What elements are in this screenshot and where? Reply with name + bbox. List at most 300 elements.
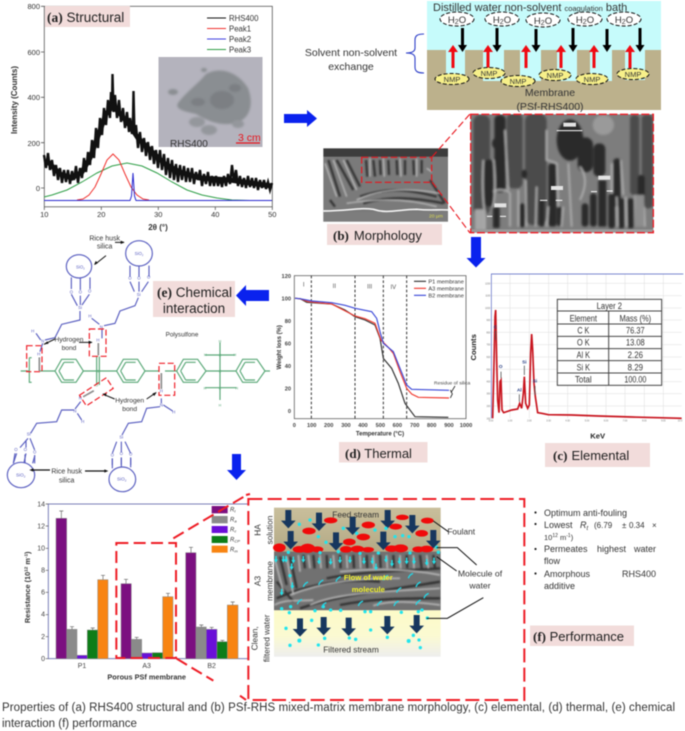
NMP labels: NMP xyxy=(584,75,600,84)
heading: (c) Elemental: (c) Elemental xyxy=(553,448,629,463)
y axis labels: 40 xyxy=(285,364,291,370)
molecule atoms: silane labels: H xyxy=(31,328,34,333)
label: bottom rice husk silica: silica xyxy=(59,477,75,484)
lower silica particles xyxy=(7,453,136,492)
legend: t xyxy=(234,509,236,514)
y tick labels: 1000 xyxy=(485,308,491,310)
red dashed frame xyxy=(248,499,524,700)
photo caption: RHS400 xyxy=(170,139,208,150)
x axis labels: 50 xyxy=(268,210,276,219)
heading: (d) Thermal: (d) Thermal xyxy=(345,446,412,461)
side label: clean filtered water: Clean, xyxy=(249,626,259,650)
axes xyxy=(491,274,683,418)
text block: performance bullets: flow xyxy=(544,556,561,566)
side label: A3 membrane xyxy=(253,561,275,601)
y axis labels: 14 xyxy=(37,501,45,508)
molecule atoms: polysulfone labels: C xyxy=(219,370,222,374)
peak labels: O xyxy=(499,364,503,369)
membrane block xyxy=(427,50,661,110)
x tick labels: 3.00 xyxy=(546,420,552,422)
molecule atoms: silane labels: N xyxy=(160,403,163,408)
y axis labels: 0 xyxy=(36,184,40,193)
NMP molecules xyxy=(435,68,649,86)
curve: A3 membrane xyxy=(295,298,449,398)
curve: Peak2 xyxy=(44,173,272,200)
molecular structure xyxy=(13,235,270,465)
stage labels: III xyxy=(367,285,372,291)
y axis labels: 800 xyxy=(27,2,40,11)
text block: performance bullets: m xyxy=(558,533,566,542)
label: top rice husk silica: Rice husk xyxy=(89,235,121,242)
molecule atoms: polysulfone labels: H xyxy=(235,386,238,390)
composition table: 8.29 xyxy=(628,362,643,372)
arrow: a to b xyxy=(284,110,317,127)
molecule atoms: silane labels: SiO xyxy=(76,264,83,269)
arrow heads xyxy=(43,241,157,396)
molecule atoms: silane labels: H xyxy=(81,419,84,424)
molecule atoms: silane labels: O xyxy=(79,290,83,295)
text block: performance bullets: highest xyxy=(597,544,627,554)
x tick labels: 4.00 xyxy=(565,420,571,422)
spectrum trace xyxy=(493,310,682,418)
bars: P1 xyxy=(56,518,108,659)
curve: P1 membrane xyxy=(295,298,448,417)
label: polysulfone: Polysulfone xyxy=(166,332,199,339)
molecule atoms: silane labels: O xyxy=(111,452,115,457)
H2O labels: 2 xyxy=(583,19,587,26)
composition table: 76.37 xyxy=(626,326,645,336)
label: solvent non-solvent exchange xyxy=(305,34,424,73)
legend: Peak3 xyxy=(229,46,251,54)
water molecules xyxy=(280,518,440,649)
x axis labels: 800 xyxy=(427,423,436,429)
molecule atoms: silane labels: Si xyxy=(78,305,82,310)
y tick labels: 200 xyxy=(486,406,491,408)
heading: (c) Elemental xyxy=(545,443,650,467)
text block: performance bullets: 0.34 xyxy=(629,521,645,530)
x axis labels: 500 xyxy=(376,423,385,429)
arrows to silica xyxy=(32,468,106,473)
H2O labels: O xyxy=(545,16,552,27)
x axis labels: 0 xyxy=(293,423,296,429)
H2O labels: O xyxy=(587,15,594,26)
molecule atoms: silane labels: O xyxy=(88,288,92,293)
label: top rice husk silica: silica xyxy=(97,244,113,251)
y axis title: -1 xyxy=(24,554,29,558)
composition table: 13.08 xyxy=(626,338,645,348)
y tick labels: 300 xyxy=(486,394,491,396)
y tick labels: 1200 xyxy=(485,283,491,285)
arrow: d to e xyxy=(236,285,269,306)
molecule atoms: silane labels: O xyxy=(14,447,18,452)
legend: Peak1 xyxy=(229,24,251,34)
filtered arrows xyxy=(293,615,424,637)
y axis labels: 0 xyxy=(288,409,291,415)
H2O molecules xyxy=(440,12,641,27)
peak labels: Si xyxy=(533,379,537,384)
label: solvent non-solvent exchange: Solvent non-solvent xyxy=(305,47,397,59)
y axis labels: 600 xyxy=(27,48,40,57)
panel: resistance bar chart xyxy=(23,495,248,682)
label: bottom rice husk silica xyxy=(51,468,83,484)
red solvent arrows xyxy=(448,45,635,68)
text block: performance bullets: water xyxy=(633,544,656,554)
label: filtered stream: Filtered stream xyxy=(323,644,379,654)
H2O labels: 2 xyxy=(455,19,459,26)
heading: (e) Chemical interaction xyxy=(153,281,235,317)
label: lower hydrogen bond: bond xyxy=(122,406,137,413)
arrow: b to c xyxy=(466,237,486,268)
side label: clean filtered water xyxy=(249,614,271,662)
x axis labels: 900 xyxy=(444,423,454,429)
label: feed stream: Feed stream xyxy=(332,509,379,519)
x tick labels: 2.00 xyxy=(527,420,532,422)
composition table: O K xyxy=(577,338,590,348)
stage labels: I xyxy=(303,283,305,289)
molecule atoms: silane labels: H xyxy=(172,409,175,414)
H2O labels: H xyxy=(576,15,583,26)
molecule atoms: silane labels: 2 xyxy=(83,266,85,270)
y axis labels xyxy=(27,2,40,193)
caption: Properties of (a) RHS400 structural and (b) PSf-RHS mixed-matrix membrane morphology, (c) elemental, (d) thermal, (e) chemical xyxy=(2,702,675,714)
H2O labels: H xyxy=(615,15,622,26)
text block: performance bullets: 10 xyxy=(544,533,552,542)
composition table: 100.00 xyxy=(624,374,646,384)
molecule atoms: silane labels: O xyxy=(129,452,133,457)
NMP labels: NMP xyxy=(625,70,641,79)
y axis labels: 20 xyxy=(285,387,291,393)
stage dashed lines xyxy=(311,276,407,419)
legend: Peak2 xyxy=(229,35,251,44)
composition table: Si K xyxy=(577,362,590,372)
molecule atoms: silane labels: N xyxy=(100,324,103,329)
silica linkers xyxy=(13,241,173,465)
callout: molecule of water xyxy=(427,548,503,618)
text block: performance bullets: Permeates xyxy=(544,544,588,554)
text block: performance bullets xyxy=(534,508,657,591)
y axis labels: 100 xyxy=(282,297,291,303)
panel: (e) chemical interaction xyxy=(7,235,270,492)
molecule atoms: polysulfone labels: H xyxy=(204,353,207,357)
y axis title: Resistance (10 xyxy=(23,572,32,623)
stage labels xyxy=(303,283,396,291)
text block: performance bullets: 12 xyxy=(552,533,558,539)
x tick labels: 7.00 xyxy=(623,420,628,422)
molecule atoms: silane labels: O xyxy=(147,274,151,279)
membrane pores xyxy=(446,50,645,81)
H2O labels: 2 xyxy=(500,19,504,26)
x axis labels xyxy=(293,423,472,429)
composition table: C K xyxy=(577,326,589,336)
text block: performance bullets: additive xyxy=(544,581,575,591)
H2O labels: H xyxy=(534,16,541,27)
y axis labels xyxy=(282,274,291,415)
molecule atoms: silane labels: H xyxy=(160,389,163,394)
zoom connector lines xyxy=(432,114,470,233)
inset photo: RHS400 powder xyxy=(158,57,262,150)
y tick labels: 600 xyxy=(486,357,491,359)
x tick labels: 10.0 xyxy=(678,420,683,422)
x tick labels: 0.00 xyxy=(489,420,494,422)
legend: c xyxy=(234,528,236,533)
x axis labels: 1000 xyxy=(460,423,472,429)
x axis labels: 700 xyxy=(410,423,419,429)
H2O labels: H xyxy=(448,15,455,26)
SEM image: full cross section xyxy=(323,148,448,222)
x axis labels: 10 xyxy=(40,210,48,219)
caption: interaction (f) performance xyxy=(2,718,137,730)
molecule atoms: silane labels: O xyxy=(24,447,28,452)
x axis labels: B2 xyxy=(207,663,216,670)
axis titles: Counts xyxy=(469,334,478,361)
peak labels: C xyxy=(494,325,498,330)
polysulfone backbone xyxy=(21,342,270,400)
x tick labels: 5.00 xyxy=(585,420,590,422)
legend: CP xyxy=(234,538,240,543)
water bath xyxy=(427,1,661,51)
y axis labels: 6 xyxy=(41,590,45,597)
NMP labels: NMP xyxy=(547,71,563,80)
x axis title: 2θ (°) xyxy=(148,223,168,232)
bars: A3 xyxy=(121,584,173,659)
molecule atoms: silane labels: N xyxy=(79,396,82,401)
legend: R xyxy=(230,527,234,533)
annotation: residue of silica: Residue of silica xyxy=(434,380,471,386)
membrane label: Membrane xyxy=(525,87,575,99)
layer: HA solution xyxy=(274,508,441,553)
scale bar: 3 cm xyxy=(238,132,261,144)
curve: Peak1 xyxy=(77,154,149,200)
legend: A3 membrane xyxy=(428,286,464,292)
stage labels: IV xyxy=(391,285,396,291)
H2O labels: H xyxy=(493,15,500,26)
zoom region xyxy=(362,157,432,182)
side label: A3 membrane: A3 xyxy=(253,576,263,586)
y axis labels xyxy=(37,501,45,663)
label: lower hydrogen bond xyxy=(115,398,144,413)
x axis labels: 40 xyxy=(211,210,219,219)
red highlight around A3 xyxy=(116,543,176,658)
text block: performance bullets: Lowest xyxy=(544,520,573,530)
legend: a xyxy=(234,519,237,524)
molecule atoms: polysulfone labels: H xyxy=(219,403,222,407)
molecule atoms: silane labels: O xyxy=(137,275,141,280)
panel: (f) performance xyxy=(240,494,524,700)
panel: (c) elemental EDS chart: KeV xyxy=(590,431,606,440)
label: top rice husk silica xyxy=(89,235,121,251)
plot grid xyxy=(492,274,682,418)
callout: molecule of water: water xyxy=(468,581,491,591)
molecule atoms: polysulfone labels: C xyxy=(219,353,222,357)
heading: (b) Morphology xyxy=(327,224,442,245)
y tick labels xyxy=(485,283,491,420)
peak labels xyxy=(494,325,537,392)
molecule atoms: silane labels: 2 xyxy=(142,253,144,257)
H2O labels: O xyxy=(626,15,633,26)
x axis labels: P1 xyxy=(78,663,86,670)
molecule atoms: silane labels: H xyxy=(37,352,40,357)
layer: A3 membrane xyxy=(274,552,441,610)
hydrogen bond dashes xyxy=(39,343,161,397)
panel: (d) thermal chart xyxy=(277,274,472,437)
y axis labels: 400 xyxy=(27,93,40,102)
y tick labels: 1100 xyxy=(485,296,491,298)
y axis labels: 60 xyxy=(285,342,291,348)
molecule atoms: polysulfone labels: H xyxy=(219,339,222,343)
composition table: Element xyxy=(570,313,597,323)
chart axes xyxy=(41,6,272,210)
legend: B2 membrane xyxy=(428,293,464,299)
NMP labels: NMP xyxy=(444,75,460,84)
curve: Peak3 xyxy=(44,163,272,200)
callout: foulant: Foulant xyxy=(447,526,476,536)
stage labels: II xyxy=(333,284,336,290)
callout: molecule of water: Molecule of xyxy=(458,569,503,579)
x axis labels: 300 xyxy=(341,423,351,429)
text block: performance bullets: R xyxy=(580,520,586,530)
bars: B2 xyxy=(186,553,238,659)
molecule atoms: silane labels: O xyxy=(33,450,37,455)
axis titles xyxy=(277,325,404,437)
heading: (f) Performance: (f) Performance xyxy=(533,629,624,644)
x axis labels: 30 xyxy=(154,210,162,219)
arrow: e to f xyxy=(227,454,246,480)
curve: RHS400 noisy trace xyxy=(44,74,272,190)
legend: R xyxy=(230,547,234,553)
lower silica particles: SiO xyxy=(16,473,24,478)
label: upper hydrogen bond: bond xyxy=(62,345,77,352)
legend: m xyxy=(234,548,238,553)
composition table: Total xyxy=(575,374,592,384)
legend xyxy=(212,506,240,553)
label: bottom rice husk silica: Rice husk xyxy=(51,468,83,475)
text block: performance bullets: RHS400 xyxy=(622,569,656,579)
y axis title: m xyxy=(23,558,32,567)
x tick labels: 8.00 xyxy=(642,420,647,422)
molecule atoms: silane labels: O xyxy=(120,451,124,456)
heading: (a) Structural: (a) Structural xyxy=(47,10,124,25)
x axis labels: 400 xyxy=(358,423,368,429)
axes box xyxy=(294,276,466,419)
panel: (b) morphology xyxy=(323,113,653,245)
legend: RHS400 xyxy=(229,14,259,23)
small downward water arrows xyxy=(274,556,436,596)
molecule atoms: silane labels: H xyxy=(88,314,92,319)
heading: (a) Structural xyxy=(45,6,130,27)
side label: A3 membrane: membrane xyxy=(265,561,275,601)
x axis title: Porous PSf membrane xyxy=(107,673,186,682)
heading: (d) Thermal xyxy=(339,442,428,462)
molecule atoms: polysulfone labels: S xyxy=(97,370,100,374)
callout: foulant xyxy=(433,521,476,536)
brace xyxy=(406,34,424,73)
molecule atoms: polysulfone labels: O xyxy=(95,384,98,388)
caption xyxy=(2,702,675,730)
NMP labels: NMP xyxy=(481,69,497,78)
composition table: 2.26 xyxy=(628,350,643,360)
molecule atoms: silane labels: Si xyxy=(119,434,123,439)
label: flow of water molecule: Flow of water xyxy=(344,573,393,582)
molecule atoms: polysulfone labels xyxy=(95,339,238,407)
panel: (a) structural XRD chart xyxy=(10,2,276,232)
H2O labels: O xyxy=(459,15,466,26)
y tick labels: 900 xyxy=(486,320,491,322)
annotation: residue of silica xyxy=(434,380,471,398)
molecule atoms: silane labels: O xyxy=(128,275,132,280)
scale label: 20 µm xyxy=(429,214,443,220)
composition table: Mass (%) xyxy=(619,313,651,323)
side label: HA solution: HA xyxy=(253,524,263,536)
molecule atoms: silane labels: Si xyxy=(137,292,141,297)
NMP labels xyxy=(444,69,641,86)
label: solvent non-solvent exchange: exchange xyxy=(328,61,374,73)
connector lines to panel f xyxy=(173,495,247,681)
x tick labels: 1.00 xyxy=(508,420,513,422)
y tick labels: 700 xyxy=(486,345,491,347)
lower silica particles: 2 xyxy=(24,475,26,479)
side label: HA solution xyxy=(253,515,275,544)
arrows to hydrogen bonds xyxy=(44,242,156,399)
y axis labels: 120 xyxy=(282,274,291,280)
heading: (b) Morphology: (b) Morphology xyxy=(333,228,422,243)
molecule atoms: silane labels xyxy=(14,251,175,457)
x axis labels xyxy=(40,210,276,219)
composition table: Layer 2 xyxy=(597,301,622,311)
NMP labels: NMP xyxy=(510,77,526,86)
label: flow of water molecule xyxy=(344,573,393,594)
SEM image: magnified pores xyxy=(471,113,653,233)
molecule atoms: silane labels: N xyxy=(73,408,77,413)
H2O labels: 2 xyxy=(622,19,626,26)
text block: performance bullets: × xyxy=(652,521,657,530)
x tick labels xyxy=(489,420,683,422)
y axis title: ) xyxy=(23,551,32,554)
foulant particles xyxy=(273,515,434,553)
side label: HA solution: solution xyxy=(265,515,275,544)
text block: performance bullets: Optimum anti-fouling xyxy=(544,508,627,518)
heading: (e) Chemical interaction: (e) Chemical xyxy=(157,285,232,300)
error bars xyxy=(59,511,235,642)
curved water arrows xyxy=(297,573,429,608)
membrane composition label: (PSf-RHS400) xyxy=(516,101,584,113)
y axis labels: 4 xyxy=(41,612,45,619)
text block: performance bullets: ) xyxy=(571,533,574,542)
molecule atoms: silane labels: N xyxy=(41,338,44,343)
feed arrows xyxy=(281,510,441,551)
y tick labels: 400 xyxy=(486,382,491,384)
text block: performance bullets: -1 xyxy=(566,533,571,539)
layer: filtered water xyxy=(274,610,441,657)
axis titles: Temperature (°C) xyxy=(356,431,404,437)
molecule atoms: polysulfone labels: C xyxy=(219,386,222,390)
side label: clean filtered water: filtered water xyxy=(261,614,271,662)
y tick labels: 500 xyxy=(486,369,491,371)
peak labels: Al xyxy=(517,387,522,392)
y axis labels: 10 xyxy=(37,545,45,552)
composition table xyxy=(557,299,662,385)
text block: performance bullets: t xyxy=(586,526,588,532)
y axis labels: 8 xyxy=(41,568,45,575)
y axis labels: 2 xyxy=(41,634,45,641)
legend: R xyxy=(230,518,234,524)
molecule atoms: polysulfone labels: H xyxy=(204,386,207,390)
molecule atoms: polysulfone labels: H xyxy=(234,353,237,357)
x axis labels: 200 xyxy=(324,423,333,429)
y axis labels: 0 xyxy=(41,656,45,663)
y axis labels: 200 xyxy=(27,139,40,148)
label: flow of water molecule: molecule xyxy=(352,585,385,594)
x tick labels: 6.00 xyxy=(604,420,609,422)
